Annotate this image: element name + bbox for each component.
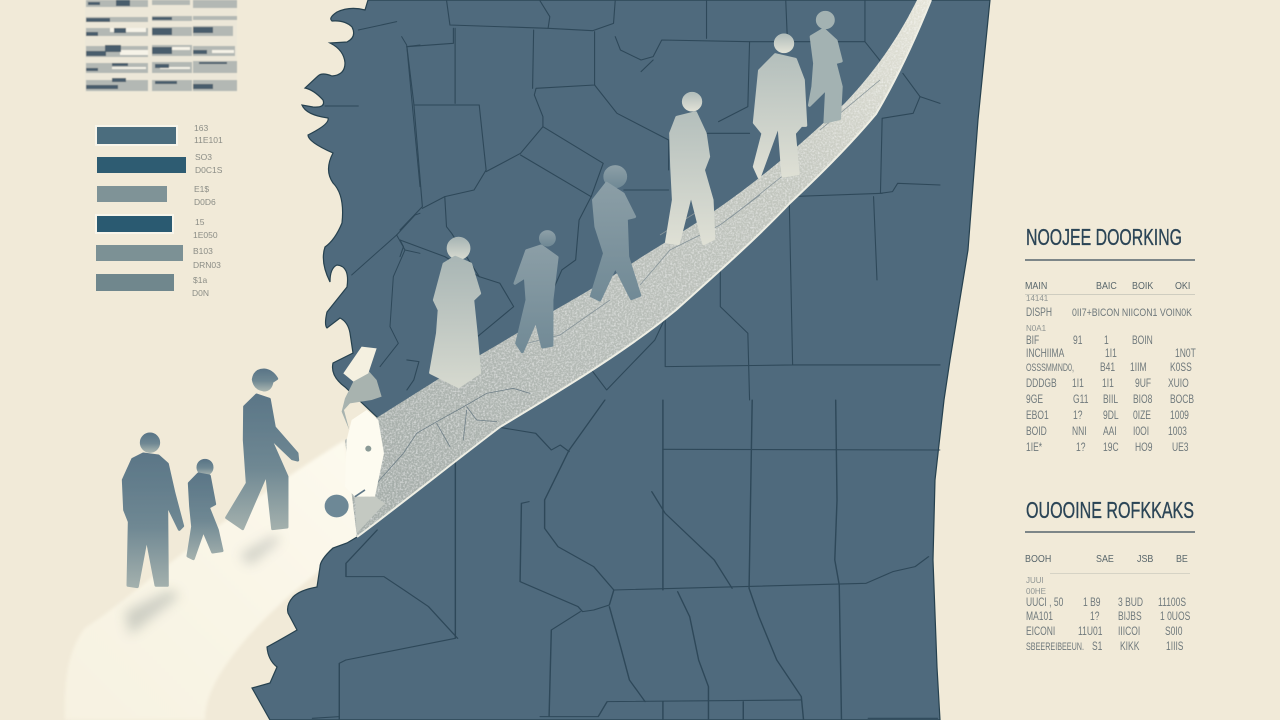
bar row 1 [95,123,223,146]
table one rows: INCHIIMA [1026,348,1064,360]
table one rows: NNI [1072,426,1087,438]
table one rows: 0II7+BICON NIICON1 VOIN0K [1072,307,1193,319]
bar row 4 [95,214,218,240]
table two rows: 1? [1090,611,1100,623]
bar row 2 [97,152,223,175]
table two header row: BOOH [1025,553,1051,565]
table two heading: OUOOINE ROFKKAKS [1026,497,1194,523]
table one rows: 0IZE [1133,410,1151,422]
table one rows: BOIN [1132,335,1153,347]
bar row 2: SO3 [195,152,212,162]
county lines west coast [325,22,420,367]
bar row 2: D0C1S [195,165,223,175]
table one rows: BIF [1026,335,1039,347]
map landmass [252,0,990,720]
bar row 5: DRN03 [193,260,221,270]
table two rows: 3 BUD [1118,597,1143,609]
walker: adult [123,434,183,587]
table one rows: XUIO [1168,378,1189,390]
table one rows: BIO8 [1133,394,1153,406]
map of regions [252,0,990,720]
table one rows: 14141 [1026,294,1049,303]
table two rows: 11100S [1158,597,1186,609]
table two rows: BIJBS [1118,611,1142,623]
background trail of light [65,440,362,720]
table one rows: G11 [1073,394,1089,406]
table one rows: DDDGB [1026,378,1057,390]
table one rows: 9GE [1026,394,1043,406]
table one header row: BOIK [1132,280,1154,292]
grey row bands [86,0,237,91]
table one rows: BOCB [1170,394,1194,406]
table two rows: 1 0UOS [1160,611,1190,623]
table two rows: JUUI [1026,576,1044,585]
table one rows: 19C [1103,442,1119,454]
table two rows: 1 B9 [1083,597,1101,609]
road upper cracks [520,80,880,345]
table one heading: NOOJEE DOORKING [1026,224,1182,250]
table two rows [1026,576,1190,653]
table one header row: OKI [1175,280,1190,292]
table one rows: 1I1 [1105,348,1117,360]
bar row 3: E1$ [194,184,209,194]
table one rows: BIIL [1103,394,1118,406]
table two rows: S1 [1092,641,1103,653]
walker: pale figure four [667,93,714,244]
table two rows: IIICOI [1118,626,1140,638]
table one rows: 1? [1076,442,1086,454]
table one rows: 1 [1104,335,1109,347]
bar row 4: 1E050 [193,230,218,240]
county lines upper section [400,0,940,400]
table two rows: 11U01 [1078,626,1103,638]
table one rows: DISPH [1026,307,1052,319]
table two rows: UUCI , 50 [1026,597,1064,609]
table one rows: N0A1 [1026,324,1047,333]
table one rows: 1003 [1168,426,1187,438]
walker: man in cap [227,370,298,529]
table one rows: 9DL [1103,410,1119,422]
bar row 1: 11E101 [194,135,223,145]
bar row 5 [96,245,221,270]
top left data block [85,0,237,92]
dark row marks [86,0,227,89]
bar row 4: 15 [195,217,205,227]
walker: pale figure five [754,35,806,177]
table two rows: 1IIIS [1166,641,1184,653]
walker: pale figure six [809,12,841,122]
table two rows: MA101 [1026,611,1053,623]
table one rows: UE3 [1172,442,1189,454]
table one rows: 1IIM [1130,362,1147,374]
table one rows: B41 [1100,362,1115,374]
walker: child [188,460,222,559]
road cracks [377,388,530,483]
table two header row: BE [1176,553,1188,565]
walker: grey figure three [591,167,640,300]
bar row 3 [97,184,216,207]
table one rows: HO9 [1135,442,1153,454]
table one rows: AAI [1103,426,1117,438]
pale row gaps [110,28,234,69]
table one rows: I0OI [1133,426,1149,438]
walkers on road [431,12,841,387]
right table one [1025,224,1196,454]
bar row 6 [96,274,209,298]
table one rows: OSSSMMND0, [1026,362,1074,374]
bar row 3: D0D6 [194,197,216,207]
walker: faded figure in light [325,347,385,533]
table two rows: S0I0 [1165,626,1183,638]
table two header row [1025,553,1188,565]
table two rows: SBEEREIBEEUN. [1026,641,1084,653]
shadows of walkers on trail [125,535,280,635]
table one rows [1026,294,1196,454]
bar row 6: D0N [192,288,209,298]
right table two [1025,497,1195,653]
table one rows: 1I1 [1102,378,1114,390]
table one header row: MAIN [1025,280,1047,292]
road surface [345,0,931,537]
table one rows: 1009 [1170,410,1189,422]
table two rows: 00HE [1026,587,1046,596]
bar row 1: 163 [194,123,208,133]
table one rows: 1? [1073,410,1083,422]
table two rows: KIKK [1120,641,1140,653]
bar row 5: B103 [193,246,213,256]
walker: grey figure two [515,232,557,352]
walker: woman in long dress [431,238,480,387]
table one rows: K0SS [1170,362,1192,374]
table one header row [1025,280,1190,292]
table two rows: EICONI [1026,626,1055,638]
table one rows: 1IE* [1026,442,1042,454]
road bright edge [357,0,931,537]
table one rows: 1I1 [1072,378,1084,390]
table one rows: 9UF [1135,378,1151,390]
bar legend [95,123,223,298]
table one header row: BAIC [1096,280,1117,292]
walkers on trail [123,347,385,587]
table one rows: EBO1 [1026,410,1049,422]
table one rows: 1N0T [1175,348,1196,360]
table two header row: SAE [1096,553,1114,565]
table two header row: JSB [1137,553,1153,565]
curved road across map [345,0,931,537]
county lines lower section [312,400,940,720]
table one rows: 91 [1073,335,1083,347]
bar row 6: $1a [193,275,207,285]
table one rows: BOID [1026,426,1047,438]
